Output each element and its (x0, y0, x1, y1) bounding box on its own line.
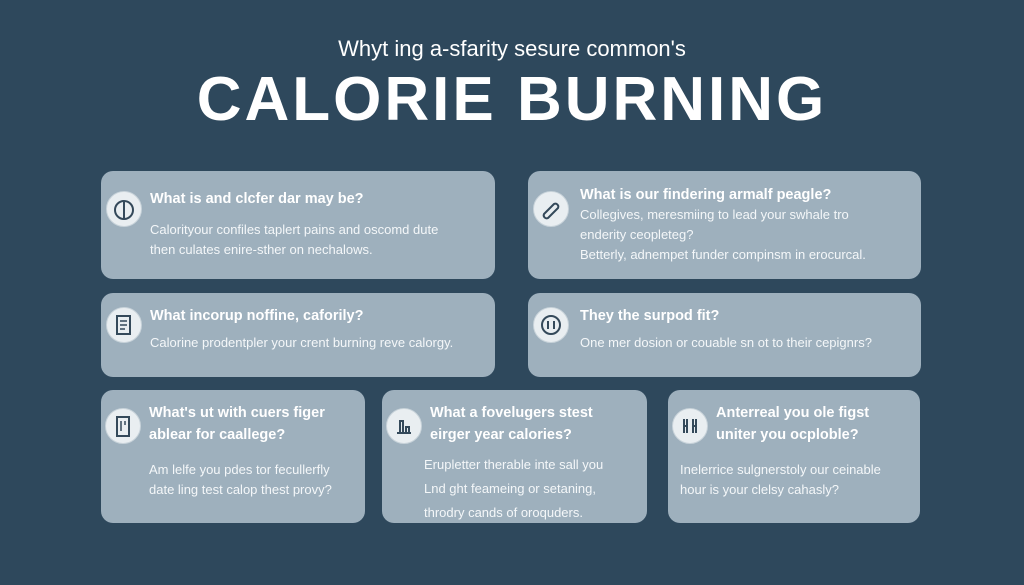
text: then culates enire-sther on nechalows. (150, 242, 373, 257)
icon: bottle (386, 408, 422, 444)
heading: Anterreal you ole figst (716, 405, 869, 421)
panel: card 1 (101, 171, 495, 279)
text (424, 457, 603, 520)
heading: ablear for caallege? (149, 427, 285, 443)
heading (149, 405, 325, 443)
icon: hands (672, 408, 708, 444)
heading: What a fovelugers stest (430, 405, 593, 421)
icon: pill (533, 191, 569, 227)
icon: apple (106, 191, 142, 227)
text: date ling test calop thest provy? (149, 482, 332, 497)
text (150, 222, 438, 257)
heading: What incorup noffine, caforily? (150, 308, 363, 324)
heading: What is our findering armalf peagle? (580, 187, 831, 203)
text: throdry cands of oroquders. (424, 505, 583, 520)
text: enderity ceopleteg? (580, 227, 693, 242)
text: Collegives, meresmiing to lead your swhale tro (580, 207, 849, 222)
heading (716, 405, 869, 443)
text: Lnd ght feameing or setaning, (424, 481, 596, 496)
heading: What is and clcfer dar may be? (150, 191, 364, 207)
text: Am lelfe you pdes tor fecullerfly (149, 462, 330, 477)
panel: card 4 (528, 293, 921, 377)
icon: document (106, 307, 142, 343)
panel: card 7 (668, 390, 920, 523)
text (580, 207, 866, 262)
panel: card 6 (382, 390, 647, 523)
icon: pause (533, 307, 569, 343)
subtitle: Whyt ing a-sfarity sesure common's (338, 36, 686, 61)
heading: eirger year calories? (430, 427, 572, 443)
panel: card 5 (101, 390, 365, 523)
panel: card 3 (101, 293, 495, 377)
text: Calorine prodentpler your crent burning reve calorgy. (150, 335, 453, 350)
heading: What's ut with cuers figer (149, 405, 325, 421)
heading: They the surpod fit? (580, 308, 719, 324)
text: hour is your clelsy cahasly? (680, 482, 839, 497)
text: One mer dosion or couable sn ot to their cepignrs? (580, 335, 872, 350)
panel: card 2 (528, 171, 921, 279)
heading: uniter you ocploble? (716, 427, 859, 443)
text: Betterly, adnempet funder compinsm in erocurcal. (580, 247, 866, 262)
title: CALORIE BURNING (197, 65, 827, 134)
text (680, 462, 881, 497)
heading (430, 405, 593, 443)
text (149, 462, 332, 497)
icon: phone (105, 408, 141, 444)
text: Inelerrice sulgnerstoly our ceinable (680, 462, 881, 477)
text: Erupletter therable inte sall you (424, 457, 603, 472)
text: Calorityour confiles taplert pains and oscomd dute (150, 222, 438, 237)
